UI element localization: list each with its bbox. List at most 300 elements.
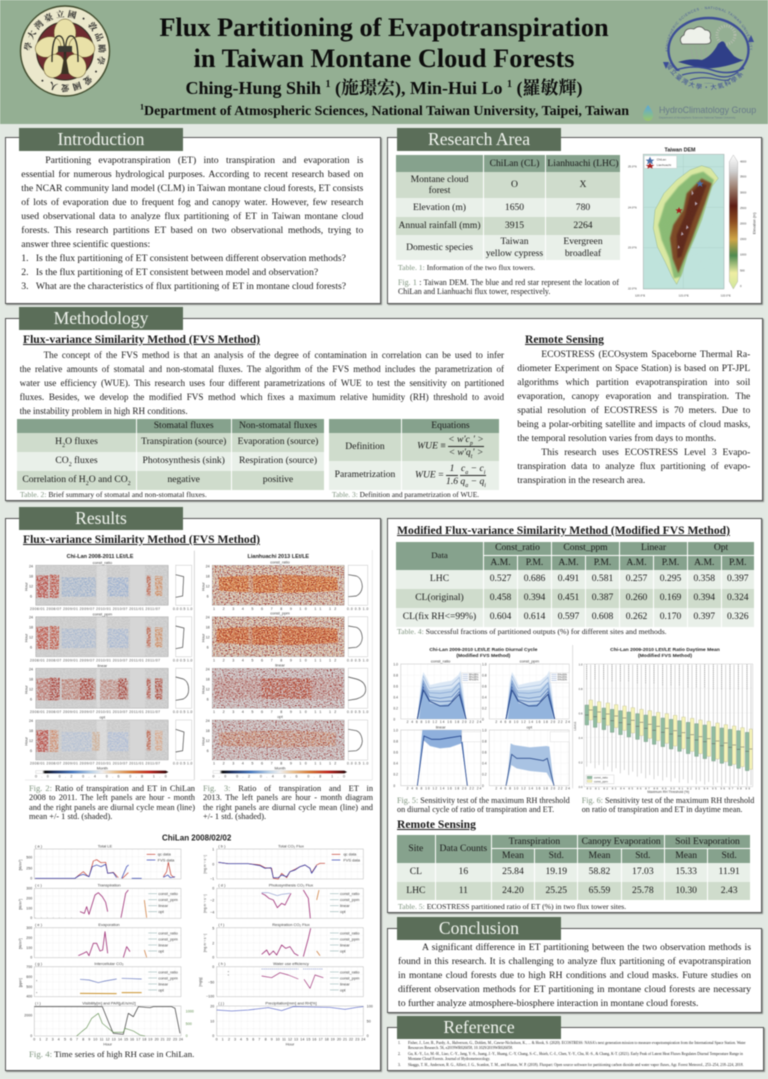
caption: table 4: Table. 4: Successful fractions of partitioned outputs (%) for different sites and methods. xyxy=(397,627,667,636)
chart: opt: Hour xyxy=(200,736,205,746)
figure 1: Taiwan DEM map xyxy=(628,148,757,298)
text: introduction: essential for numerous hydrological purposes. According to recent research based on xyxy=(21,169,363,180)
chart: evaporation: ( e ) xyxy=(35,922,43,927)
table 3: WUE equations: < w′cp′ > xyxy=(448,434,484,447)
figure 2: Chi-Lan hour-month diagrams: Chi-Lan 2008-2011 LEt/LE xyxy=(67,554,134,560)
chart: opt: 6 xyxy=(207,749,209,753)
chart: linear: 24 xyxy=(29,667,33,671)
table 1: flux towers xyxy=(395,154,621,260)
table 5: ECOSTRESS ratios: 16 xyxy=(459,866,468,877)
heading: introduction: Introduction xyxy=(58,129,144,149)
text: reference list: Skaggs, T. H., Anderson, R. G., Alfieri, J. G., Scanlon, T. M., and Kustas, W. P. (2018). Fluxpart: Open source software for partitioning carbon dioxide and water vapor fluxes, Agr. Forest Meteorol., 253–254, 218–224, 2018. xyxy=(408,1062,744,1066)
chart: precipitation and RH: 1 xyxy=(222,1037,224,1041)
caption: figure 2 xyxy=(28,784,196,822)
table 4: successful fractions: 0.326 xyxy=(727,611,749,622)
table 5: ECOSTRESS ratios: 25.78 xyxy=(632,885,654,896)
table 4: successful fractions: 0.394 xyxy=(693,592,715,603)
chart: precipitation and RH: 7 xyxy=(258,1037,260,1041)
table 5: ECOSTRESS ratios: Mean xyxy=(589,850,610,861)
table 1: flux towers: 780 xyxy=(576,202,590,213)
table 5: ECOSTRESS ratios: 2.43 xyxy=(721,885,738,896)
chart: opt: 12 xyxy=(206,739,210,743)
chart: visibility and PAR: 11 xyxy=(100,1037,104,1041)
text: remote sensing method: transpiration in the research area. xyxy=(517,475,645,486)
table 4: successful fractions: 0.295 xyxy=(660,573,681,584)
table 5: ECOSTRESS ratios: 11 xyxy=(459,885,468,896)
chart: respiration CO2 flux: opt xyxy=(340,948,346,953)
table 1: flux towers: Taiwan xyxy=(500,236,529,247)
chart: const_ppm: Hour xyxy=(200,633,205,642)
chart: total CO2 flux: −1 xyxy=(210,877,214,881)
heading: reference xyxy=(397,1016,561,1039)
chart: const_ppm xyxy=(200,611,368,662)
chart: const_ratio: 12 xyxy=(206,584,210,588)
table 4: successful fractions: Const_ratio xyxy=(495,542,540,553)
chart: visibility and PAR: 21 xyxy=(161,1037,165,1041)
chart: intercellular CO2: ( g ) xyxy=(35,961,43,966)
figure 6: daytime mean box plots: 1.0 xyxy=(579,663,583,667)
chart: transpiration: const_ppm xyxy=(158,897,179,902)
chart: visibility and PAR: 15 xyxy=(124,1037,128,1041)
chart: precipitation and RH: 10 xyxy=(276,1037,280,1041)
icon: atmospheric sciences logo xyxy=(662,6,754,90)
heading: conclusion xyxy=(397,917,561,940)
chart: precipitation and RH: 15 xyxy=(306,1037,310,1041)
table 2: stomatal and non-stomatal fluxes: positive xyxy=(263,474,293,485)
table 4: successful fractions: 0.597 xyxy=(558,611,579,622)
chart: const_ratio: 1 2 3 4 5 6 7 8 9 10 11 12 xyxy=(213,607,336,611)
table 4: successful fractions: CL(original) xyxy=(415,592,464,603)
chart: photosynthesis CO2 flux xyxy=(203,883,363,918)
chart: linear: Hour xyxy=(23,685,28,694)
icon: atmospheric sciences logo: ATMOSPHERIC SCIENCES · NATIONAL TAIWAN UNIVERSITY xyxy=(665,6,752,52)
chart: precipitation and RH: 21 xyxy=(343,1037,347,1041)
chart: const_ratio: 0.0 0.5 1.0 xyxy=(347,607,368,611)
panel: conclusion xyxy=(387,928,762,1013)
text: reference list: 2. xyxy=(398,1052,401,1056)
icon: HydroClimatology Group logo: HydroClimatology Group xyxy=(659,105,756,115)
chart: water use efficiency: const_ppm xyxy=(340,975,360,980)
chart: intercellular CO2: 400 xyxy=(26,994,32,998)
text: remote sensing method: algorithms which partition evapotranspiration into soil xyxy=(517,377,750,388)
chart: evaporation: opt xyxy=(158,948,165,953)
heading: results: Results xyxy=(75,508,127,528)
icon: HydroClimatology Group logo xyxy=(643,105,756,121)
panel: research area xyxy=(387,137,762,304)
chart: const_ratio: Hour xyxy=(23,582,28,591)
axis labels: figure 5: 2 4 6 8 10 12 14 16 18 20 22 24 xyxy=(495,720,570,724)
icon: atmospheric sciences logo: 國立臺灣大學・大氣科學系 xyxy=(666,62,744,90)
chart: const_ratio: 18 xyxy=(29,574,33,578)
chart: linear: 2008/01 2008/07 2009/01 2009/07 2010/01 2010/07 2011/01 2011/07 xyxy=(30,710,160,714)
table 3: WUE equations: ca − ci xyxy=(461,463,485,476)
chart: const_ppm: 0.0 0.5 1.0 xyxy=(347,658,368,662)
table 3: WUE equations: < w′qt′ > xyxy=(449,447,483,460)
legend: figure 6: const_ratio xyxy=(594,776,608,780)
chart: visibility and PAR: 3 xyxy=(52,1037,54,1041)
axis labels: figure 5: 0 xyxy=(482,717,484,721)
chart: precipitation and RH: Hour xyxy=(286,1042,295,1047)
axis labels: figure 5: 0.2 xyxy=(482,706,487,710)
text: conclusion: found in this research. It is challenging to analyze flux partitioning of evapotranspiration xyxy=(398,956,751,967)
chart: visibility and PAR: 7 xyxy=(76,1037,78,1041)
chart: evaporation: 100 xyxy=(26,946,32,950)
axis labels: figure 5: 0 xyxy=(393,717,395,721)
chart: const_ppm xyxy=(489,664,569,719)
figure 6: daytime mean box plots: LEt/LE xyxy=(573,722,577,730)
chart: precipitation and RH: 9 xyxy=(271,1037,273,1041)
chart: precipitation and RH: 13 xyxy=(294,1037,298,1041)
chart: const_ppm: 24 xyxy=(206,616,210,620)
chart: precipitation and RH: 20 xyxy=(210,1005,214,1009)
chart: opt xyxy=(200,714,368,766)
table 4: successful fractions xyxy=(395,541,755,627)
chart: total LE: [W/m²] xyxy=(19,860,23,870)
axis labels: figure 5: 0 xyxy=(482,784,484,788)
caption: figure 5: on diurnal cycle of ratio of transpiration and ET. xyxy=(397,805,554,814)
chart: visibility and PAR: 0 xyxy=(33,1037,35,1041)
axis labels: figure 5: 0.6 xyxy=(393,684,398,688)
chart: transpiration: [W/m²] xyxy=(19,899,23,910)
chart: total CO2 flux xyxy=(203,843,363,881)
chart: linear: 6 xyxy=(30,697,32,701)
chart: const_ppm: 0.0 0.5 1.0 xyxy=(173,658,192,662)
chart: precipitation and RH: 100 xyxy=(367,1005,373,1009)
table 3: WUE equations: WUE = xyxy=(415,469,444,480)
axis labels: figure 5: 0.6 xyxy=(482,684,487,688)
chart: precipitation and RH xyxy=(210,1000,373,1047)
chart: visibility and PAR: 24 xyxy=(179,1037,183,1041)
text: conclusion xyxy=(398,942,752,1009)
chart: precipitation and RH: 6 xyxy=(252,1037,254,1041)
figure 5: diurnal cycle sensitivity: Chi-Lan 2009-2010 LEt/LE Ratio Diurnal Cycle xyxy=(429,647,538,653)
text: FVS method: fluxes. Besides, we develop the modified FVS method which fixes a maximum relative humidity (RH) threshold to avoid xyxy=(20,392,504,402)
text: remote sensing method: the temporal resolution varies from days to months. xyxy=(517,433,716,444)
chart: respiration CO2 flux: [mg m⁻² s⁻¹] xyxy=(203,934,207,952)
text: introduction: Partitioning evapotranspiration (ET) into transpiration and evaporation is xyxy=(45,155,363,166)
table 4: successful fractions: 0.262 xyxy=(626,611,647,622)
text: introduction xyxy=(20,155,364,292)
caption: table 5: Table. 5: ECOSTRESS partitioned ratio of ET (%) in two flux tower sites. xyxy=(398,902,626,910)
chart: const_ppm: 12 xyxy=(29,636,33,640)
figure 1: Taiwan DEM map: 24.0°N xyxy=(628,205,637,209)
header banner xyxy=(0,0,768,124)
table 5: ECOSTRESS ratios: 25.84 xyxy=(502,866,524,877)
axis labels: figure 5: 1.0 xyxy=(482,728,487,732)
chart: const_ppm: 6 xyxy=(30,646,32,650)
table 4: successful fractions: Data xyxy=(431,550,448,560)
axis labels: figure 5: 1.0 xyxy=(393,728,398,732)
chart: const_ppm: Hour xyxy=(23,633,28,642)
table 2: stomatal and non-stomatal fluxes xyxy=(16,418,325,490)
chart: visibility and PAR: ( i ) xyxy=(35,1000,41,1005)
text: conclusion: in montane cloud forests due to high RH conditions and cloud masks. Future studies on xyxy=(398,970,751,981)
figure 6: daytime mean box plots: 0.2 xyxy=(579,761,583,765)
figure 6: daytime mean box plots: 80 81 82 83 84 85 86 87 88 89 90 91 92 93 94 95 96 97 98 99 xyxy=(587,787,750,791)
figure 1: Taiwan DEM map: 500 xyxy=(740,268,745,272)
table 5: ECOSTRESS ratios: 65.59 xyxy=(589,885,610,896)
chart: water use efficiency: −50 xyxy=(208,980,214,984)
caption: figure 3: +/- 1 std. (shaded). xyxy=(203,812,266,821)
heading: introduction xyxy=(19,128,183,151)
figure 1: Taiwan DEM map: 122.0°E xyxy=(721,294,731,298)
chart: opt: opt xyxy=(277,714,284,719)
chart: respiration CO2 flux: ( f ) xyxy=(218,922,225,927)
table 4: successful fractions: 0.608 xyxy=(592,611,613,622)
chart: evaporation: Evaporation xyxy=(98,922,120,927)
table 4: successful fractions: 0.397 xyxy=(693,611,715,622)
chart: photosynthesis CO2 flux: 0 xyxy=(212,887,214,891)
text: FVS method: the instability problem in high RH conditions. xyxy=(20,406,188,416)
chart: opt: 0.0 0.5 1.0 xyxy=(347,762,368,766)
table 4: successful fractions: 0.614 xyxy=(524,611,545,622)
chart: transpiration: 0 xyxy=(30,916,32,920)
chart: evaporation: 0 xyxy=(30,955,32,959)
subheading: FVS method: Flux-variance Similarity Method (FVS Method) xyxy=(23,333,260,346)
table 4: successful fractions: LHC xyxy=(430,573,449,584)
chart: precipitation and RH: 0 xyxy=(216,1037,218,1041)
text: FVS method xyxy=(19,350,505,417)
chart: opt: 0.0 0.5 1.0 xyxy=(173,762,192,766)
table 5: ECOSTRESS ratios: 19.19 xyxy=(545,866,567,877)
chart: photosynthesis CO2 flux: linear xyxy=(340,903,350,908)
table 4: successful fractions: 0.458 xyxy=(490,592,511,603)
table 4: successful fractions: Opt xyxy=(714,542,728,553)
table 5: ECOSTRESS ratios: 15.33 xyxy=(675,866,697,877)
chart: transpiration: 300 xyxy=(26,887,32,891)
axis labels: figure 5: 2 4 6 8 10 12 14 16 18 20 22 24 xyxy=(407,787,481,791)
chart: evaporation: linear xyxy=(158,942,169,947)
chart: respiration CO2 flux: Respiration CO₂ Flux xyxy=(272,922,310,927)
table 4: successful fractions: 0.604 xyxy=(490,611,511,622)
heading: methodology: Methodology xyxy=(54,308,148,328)
authors: Ching-Hung Shih 1 (施璟宏), Min-Hui Lo 1 (羅敏輝) xyxy=(185,78,583,98)
chart: water use efficiency: opt xyxy=(340,987,346,992)
chart: opt: 1 2 3 4 5 6 7 8 9 10 11 12 xyxy=(213,762,336,766)
figure 6: daytime mean box plots: 0.8 xyxy=(579,687,583,691)
subheading: FVS results: Flux-variance Similarity Method (FVS Method) xyxy=(23,533,260,546)
chart: transpiration: Transpiration xyxy=(97,883,121,888)
chart: total LE: 500 xyxy=(26,855,32,859)
chart: opt: 24 xyxy=(206,719,210,723)
table 3: WUE equations: 1.6 xyxy=(446,476,458,487)
chart: const_ppm: 12 xyxy=(206,636,210,640)
figure 6: daytime mean box plots: Chi-Lan 2009-2010 LEt/LE Ratio Daytime Mean xyxy=(610,647,720,653)
chart: visibility and PAR xyxy=(24,1000,194,1047)
icon: NTU logo: 學大灣臺立國・敦品勵學・愛國愛人・ xyxy=(23,10,107,93)
chart: respiration CO2 flux: 2 xyxy=(212,941,214,945)
caption: figure 1: Fig. 1 : Taiwan DEM. The blue and red star represent the location of xyxy=(398,278,619,287)
chart: transpiration: const_ratio xyxy=(158,891,179,896)
poster title: Flux Partitioning of Evapotranspiration xyxy=(159,13,609,42)
text: reference list: 3. xyxy=(398,1062,401,1066)
caption: table 2: Table. 2: Brief summary of stomatal and non-stomatal fluxes. xyxy=(20,490,207,499)
chart: opt: 18 xyxy=(29,729,33,733)
table 2: stomatal and non-stomatal fluxes: Photosynthesis (sink) xyxy=(142,455,225,466)
chart: visibility and PAR: Visibility[m] and PAR[μE/s/m2] xyxy=(82,1000,136,1005)
chart: const_ratio: 12 xyxy=(29,584,33,588)
figure 1: Taiwan DEM map: 4000 xyxy=(740,159,747,163)
chart: visibility and PAR: 10 xyxy=(93,1037,97,1041)
figure 1: Taiwan DEM map: 25.0°N xyxy=(628,165,637,169)
panel: introduction xyxy=(5,137,381,304)
chart: precipitation and RH: 11 xyxy=(282,1037,286,1041)
chart: intercellular CO2: linear xyxy=(158,981,169,986)
figure 4: ChiLan time series panels: ChiLan 2008/02/02 xyxy=(162,833,232,842)
caption: figure 6 xyxy=(581,796,755,815)
panel: methodology xyxy=(5,318,763,501)
chart: const_ppm: const_ppm xyxy=(93,611,113,616)
text: remote sensing method: evaporation, canopy evaporation and transpiration. The xyxy=(517,391,750,402)
axis labels: figure 5 xyxy=(393,662,570,791)
text: introduction: 2. Is the flux partitioning of ET consistent between model and observation? xyxy=(21,267,318,278)
chart: photosynthesis CO2 flux: opt xyxy=(340,909,346,914)
table 3: WUE equations xyxy=(328,418,500,490)
chart: total CO2 flux: qc data xyxy=(343,852,357,857)
chart: evaporation xyxy=(19,922,181,959)
table 1: flux towers: 3915 xyxy=(505,220,524,231)
chart: photosynthesis CO2 flux: −4 xyxy=(210,911,214,915)
legend: figure 6 xyxy=(586,775,614,784)
chart: const_ppm: 1 2 3 4 5 6 7 8 9 10 11 12 xyxy=(213,658,336,662)
table 4: successful fractions: 0.527 xyxy=(490,573,511,584)
chart: respiration CO2 flux: 5 xyxy=(212,927,214,931)
table 5: ECOSTRESS ratios: Std. xyxy=(635,850,650,861)
axis labels: figure 5: 2 4 6 8 10 12 14 16 18 20 22 24 xyxy=(407,720,481,724)
axis labels: figure 5: 0.4 xyxy=(482,695,487,699)
table 4: successful fractions: P.M. xyxy=(662,557,679,568)
text: introduction: 3. What are the characteristics of flux partitioning of ET in montane cloud forests? xyxy=(21,281,346,292)
chart: intercellular CO2: 500 xyxy=(26,985,32,989)
caption: figure 5 xyxy=(396,796,570,815)
figure 6: daytime mean box plots: Maximum RH Threshold (%) xyxy=(647,790,689,794)
panel: results left xyxy=(5,518,381,1071)
chart: precipitation and RH: 5 xyxy=(246,1037,248,1041)
chart: const_ratio: 24 xyxy=(29,564,33,568)
chart: water use efficiency: 0 xyxy=(212,965,214,969)
table 1: flux towers: Elevation (m) xyxy=(413,202,466,213)
table 5: ECOSTRESS ratios: 10.30 xyxy=(675,885,697,896)
chart: const_ratio: RH≤99% xyxy=(469,673,478,676)
table 1: flux towers: yellow cypress xyxy=(486,248,543,258)
chart: water use efficiency xyxy=(199,961,363,998)
chart: water use efficiency: ( h ) xyxy=(218,961,226,966)
text: reference list: 1. xyxy=(398,1040,401,1044)
table 1: flux towers: ChiLan (CL) xyxy=(490,158,539,169)
table 1: flux towers: Domestic species xyxy=(406,242,473,253)
chart: const_ppm: 24 xyxy=(29,616,33,620)
poster title xyxy=(159,13,609,73)
chart: transpiration: linear xyxy=(158,903,169,908)
table 5: ECOSTRESS ratios: Mean xyxy=(675,850,697,861)
chart: total CO2 flux: 0 xyxy=(212,862,214,866)
chart: visibility and PAR: 1 xyxy=(39,1037,41,1041)
chart: visibility and PAR: 5 xyxy=(64,1037,66,1041)
caption: table 1: Table. 1: Information of the two flux towers. xyxy=(398,263,535,272)
chart: visibility and PAR: 6 xyxy=(70,1037,72,1041)
chart: transpiration xyxy=(19,883,181,920)
axis labels: figure 5: 0.2 xyxy=(482,772,487,776)
figure 1: Taiwan DEM map: 0 xyxy=(740,284,742,288)
chart: const_ratio: const_ratio xyxy=(93,560,113,565)
axis labels: figure 5: 0.2 xyxy=(393,772,398,776)
table 5: ECOSTRESS ratios: Mean xyxy=(502,850,524,861)
chart: visibility and PAR: 500 xyxy=(186,1022,192,1026)
chart: intercellular CO2: opt xyxy=(158,987,165,992)
chart: const_ratio: const_ratio xyxy=(270,559,291,564)
chart: visibility and PAR: 22 xyxy=(167,1037,171,1041)
text: conclusion: A significant difference in ET partitioning between the two observation methods is xyxy=(422,942,751,953)
chart: const_ratio xyxy=(401,664,481,719)
chart: photosynthesis CO2 flux: ( d ) xyxy=(218,883,226,888)
table 2: stomatal and non-stomatal fluxes: CO2 fluxes xyxy=(55,455,98,468)
chart: intercellular CO2: Intercellular CO₂ xyxy=(94,961,124,966)
axis labels: figure 5: 1.0 xyxy=(482,662,487,666)
chart: const_ratio: 2008/01 2008/07 2009/01 2009/07 2010/01 2010/07 2011/01 2011/07 xyxy=(30,607,160,611)
chart: const_ratio: 6 xyxy=(30,594,32,598)
text: FVS method: The concept of the FVS method is that an analysis of the degree of contamination in correlation can be used to infer xyxy=(44,350,504,360)
chart: opt: Hour xyxy=(23,736,28,746)
chart: photosynthesis CO2 flux: const_ratio xyxy=(340,891,360,896)
chart: total LE: ( a ) xyxy=(35,843,43,848)
table 5: ECOSTRESS ratios: Site xyxy=(408,843,423,854)
chart: opt: opt xyxy=(100,715,106,720)
chart: total CO2 flux: FVS data xyxy=(343,857,361,862)
colorbar: figure 2: 0.0 0.2 0.4 0.6 0.8 1.0 xyxy=(35,774,167,778)
chart: opt: 2008/01 2008/07 2009/01 2009/07 2010/01 2010/07 2011/01 2011/07 xyxy=(30,762,160,766)
figure 1: Taiwan DEM map: Elevation (m) xyxy=(753,213,757,234)
table 5: ECOSTRESS ratios: 24.20 xyxy=(502,885,524,896)
figure 6: daytime mean box plots xyxy=(573,647,753,794)
chart: total CO2 flux: 1 xyxy=(212,847,214,851)
figure 6: daytime mean box plots: 0.4 xyxy=(579,736,583,740)
table 2: stomatal and non-stomatal fluxes: Non-stomatal fluxes xyxy=(239,420,317,431)
table 4: successful fractions: P.M. xyxy=(594,557,611,568)
figure 3: Lianhuachi hour-month diagrams: Month xyxy=(274,765,286,770)
subheading: modified FVS: Modified Flux-variance Similarity Method (Modified FVS Method) xyxy=(397,524,730,537)
chart: visibility and PAR: 8 xyxy=(82,1037,84,1041)
chart: precipitation and RH: 16 xyxy=(312,1037,316,1041)
chart: const_ratio: 24 xyxy=(206,564,210,568)
legend: figure 6: const_ppm xyxy=(594,779,608,783)
captions: figures 2 and 3 xyxy=(28,784,374,822)
figure 6: daytime mean box plots: 0.0 xyxy=(579,785,583,789)
chart: total CO2 flux: Total CO₂ Flux xyxy=(278,843,304,848)
figure 2: Chi-Lan hour-month diagrams xyxy=(23,550,372,780)
table 2: stomatal and non-stomatal fluxes: Stomatal fluxes xyxy=(154,420,214,431)
axis labels: figure 5: 0.8 xyxy=(393,673,398,677)
figure 4: ChiLan time series panels xyxy=(19,833,373,1047)
axis labels: figure 5: 0.6 xyxy=(482,750,487,754)
chart: intercellular CO2: const_ppm xyxy=(158,975,179,980)
figure 1: Taiwan DEM map: 121.0°E xyxy=(679,294,689,298)
chart: total LE xyxy=(19,843,181,881)
text: introduction: answer three scientific questions: xyxy=(21,239,150,250)
table 4: successful fractions: 0.491 xyxy=(558,573,579,584)
chart: respiration CO2 flux: linear xyxy=(340,942,350,947)
table 2: stomatal and non-stomatal fluxes: Evaporation (source) xyxy=(238,436,318,447)
chart: linear xyxy=(23,663,192,714)
figure 1: Taiwan DEM map: 23.0°N xyxy=(628,246,637,250)
chart: const_ratio xyxy=(200,559,368,611)
chart: linear: 0.0 0.5 1.0 xyxy=(173,710,192,714)
text: introduction: forests. This research partitions ET based on two observational methods, trying to xyxy=(21,225,363,236)
table 3: WUE equations: Parametrization xyxy=(335,469,395,480)
chart: visibility and PAR: 4 xyxy=(58,1037,60,1041)
chart: const_ppm: 18 xyxy=(206,626,210,630)
chart: total CO2 flux: ( b ) xyxy=(218,843,226,848)
chart: const_ratio: RH≤95% xyxy=(469,676,478,679)
